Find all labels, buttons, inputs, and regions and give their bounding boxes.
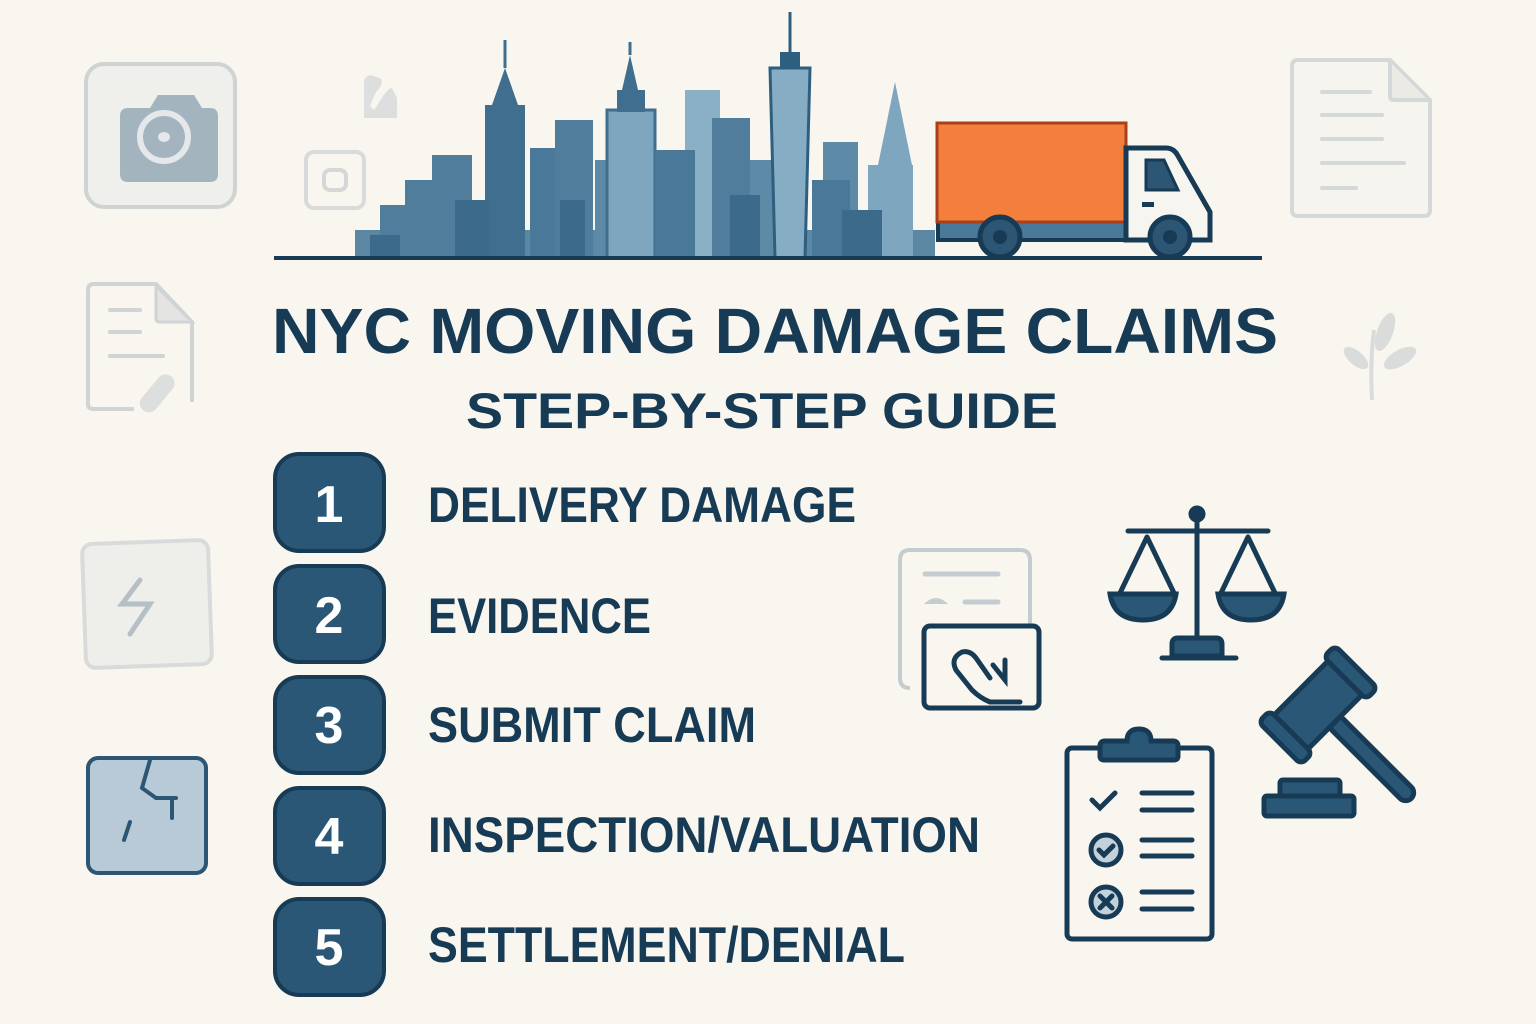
icon: document with clip	[88, 284, 192, 416]
icon: cracked box	[88, 758, 206, 873]
icon: document top right	[1292, 60, 1430, 216]
icon: small camera	[306, 152, 364, 208]
step 2: EVIDENCE	[428, 588, 651, 644]
steps list	[275, 454, 980, 995]
icon: moving truck	[937, 123, 1210, 257]
step 4: INSPECTION/VALUATION	[428, 807, 980, 863]
icon: scales of justice	[1110, 508, 1284, 658]
step 4	[275, 788, 980, 884]
ground line	[274, 256, 1262, 260]
icon: gavel	[1259, 646, 1450, 837]
icon: leaf	[1340, 310, 1420, 400]
subtitle: STEP-BY-STEP GUIDE	[466, 383, 1058, 439]
icon: card with hand	[900, 550, 1039, 708]
icon: small shape	[364, 75, 397, 118]
step 4: 4	[315, 808, 344, 866]
skyline	[355, 12, 935, 258]
step 5	[275, 899, 905, 995]
step 2: 2	[315, 587, 343, 645]
step 3: SUBMIT CLAIM	[428, 697, 756, 753]
step 5: SETTLEMENT/DENIAL	[428, 917, 905, 973]
step 1: DELIVERY DAMAGE	[428, 477, 856, 533]
title: NYC MOVING DAMAGE CLAIMS	[272, 295, 1278, 367]
icon: lightning box	[82, 540, 212, 668]
step 1	[275, 454, 856, 551]
step 1: 1	[315, 476, 343, 534]
step 3	[275, 677, 756, 773]
step 2	[275, 566, 651, 662]
icon: checklist clipboard	[1067, 729, 1212, 939]
icon: camera box	[86, 64, 235, 207]
step 5: 5	[315, 919, 343, 977]
step 3: 3	[315, 697, 343, 755]
